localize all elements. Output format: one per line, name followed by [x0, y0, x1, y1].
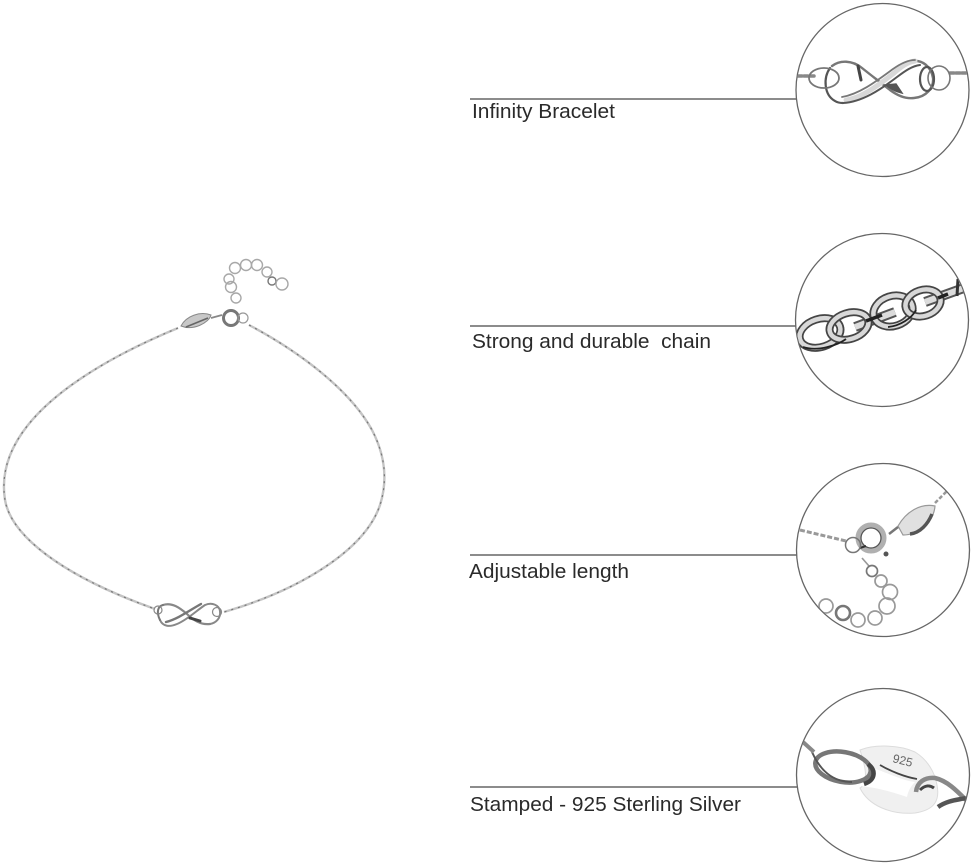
- bracelet photo: [4, 260, 384, 626]
- clasp and extender chain: [181, 260, 288, 328]
- left chain strand: [4, 328, 178, 609]
- label: Stamped - 925 Sterling Silver: [470, 793, 741, 816]
- label: Infinity Bracelet: [472, 100, 615, 123]
- detail circle: clasp: [796, 464, 970, 636]
- detail circle: chain links: [796, 234, 972, 406]
- detail circle: 925 stamp: [796, 688, 970, 862]
- label: Adjustable length: [469, 560, 629, 583]
- right chain strand: [224, 325, 384, 612]
- infinity charm: [154, 604, 222, 626]
- label: Strong and durable chain: [472, 330, 711, 353]
- detail circle: infinity charm: [796, 4, 969, 176]
- stamp mark: 925: [891, 751, 914, 770]
